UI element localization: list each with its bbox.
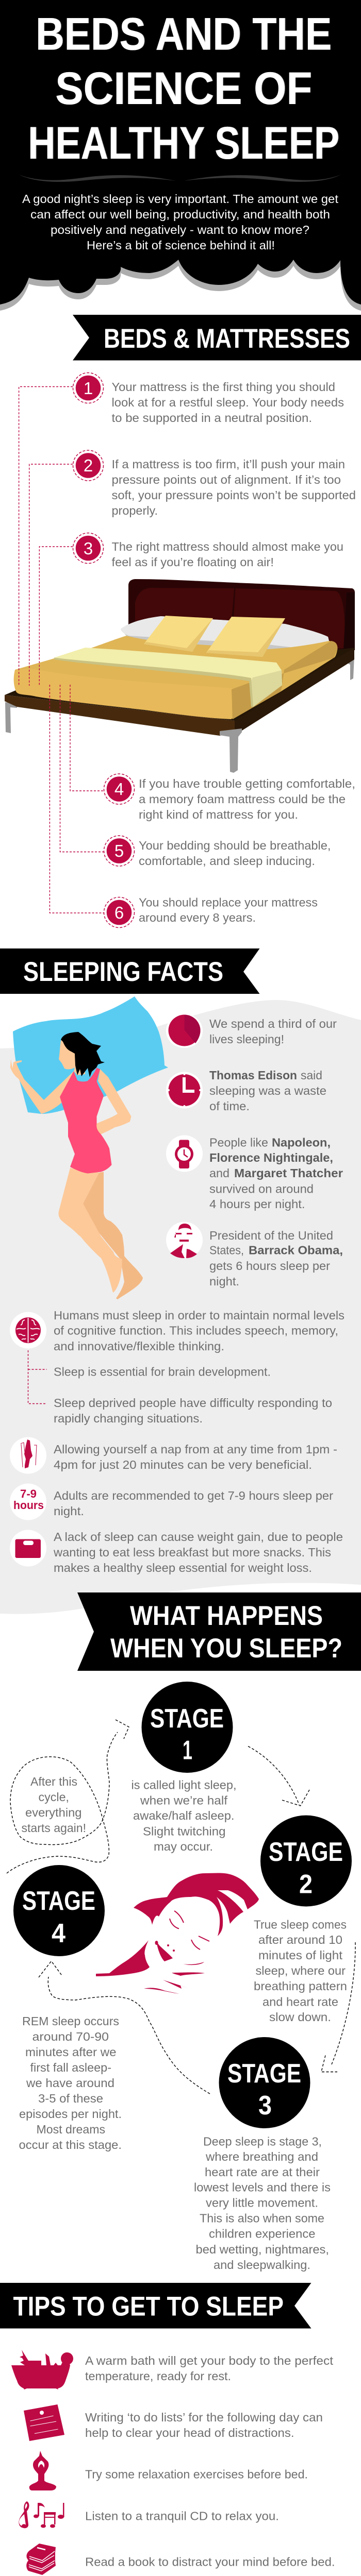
brain dashed connector — [28, 1350, 47, 1403]
title: SCIENCE OF — [55, 62, 312, 114]
fact 2: Thomas Edison: sleeping was a waste — [209, 1084, 326, 1097]
fact 4: Barack Obama — [166, 1222, 343, 1288]
yellow pillows — [144, 616, 285, 657]
step 5: 5 — [114, 841, 124, 860]
fact: sleep deprived: rapidly changing situations. — [54, 1412, 203, 1425]
stage 4 text: first fall asleep- — [30, 2061, 111, 2074]
fact: brain and cognition: of cognitive function. This includes speech, memory, — [54, 1324, 338, 1337]
step 4: 4 — [114, 779, 124, 799]
fact: brain and cognition — [10, 1309, 344, 1353]
stage 3: STAGE — [227, 2059, 301, 2089]
step 5 — [104, 836, 331, 868]
back leg — [83, 1172, 143, 1299]
stage 3 text: heart rate are at their — [205, 2165, 320, 2179]
step 6: around every 8 years. — [139, 911, 256, 924]
intro text: A good night’s sleep is very important. The amount we get — [22, 192, 339, 206]
step 3 — [73, 533, 343, 569]
fact 2: Thomas Edison: of time. — [209, 1099, 250, 1113]
stage 2 text: after around 10 — [258, 1933, 342, 1946]
step 2: properly. — [111, 504, 158, 517]
step 2: If a mattress is too firm, it’ll push your main — [111, 457, 345, 471]
cycle note text — [22, 1775, 86, 1835]
stage 2 text: breathing pattern — [254, 1979, 347, 1993]
step 1: Your mattress is the first thing you should — [111, 380, 335, 394]
swoosh divider — [19, 175, 341, 182]
step 5: Your bedding should be breathable, — [139, 839, 331, 852]
fact 2: Thomas Edison — [166, 1069, 326, 1113]
illustration: sleeping face — [96, 1873, 259, 1994]
step 4: If you have trouble getting comfortable, — [139, 777, 355, 790]
stage 4: STAGE — [22, 1886, 95, 1916]
stage 2 text: True sleep comes — [254, 1918, 347, 1931]
stage 3 text: lowest levels and there is — [194, 2180, 331, 2194]
bed frame — [5, 648, 354, 736]
stage 1 text: when we’re half — [140, 1794, 228, 1807]
step 3: feel as if you’re floating on air! — [111, 555, 274, 569]
stage 4 text: occur at this stage. — [19, 2138, 122, 2151]
stage 1: 1 — [183, 1735, 192, 1765]
step 5: comfortable, and sleep inducing. — [139, 854, 315, 868]
fact: weight gain: wanting to eat less breakfast but more snacks. This — [53, 1546, 331, 1559]
intro text — [22, 192, 339, 252]
fact: 7-9 hours — [10, 1484, 333, 1520]
tip 3: yoga — [29, 2451, 308, 2490]
banner: sleeping facts — [0, 948, 260, 994]
tip 2: to do list — [24, 2404, 323, 2441]
fact 4: Barack Obama: night. — [209, 1275, 239, 1288]
fact 3: Napoleon, Nightingale, Thatcher: and — [209, 1166, 229, 1180]
step 4 — [104, 774, 355, 821]
stage 4 — [13, 1865, 105, 1956]
blue pillow — [13, 996, 168, 1114]
fact 3: Napoleon, Nightingale, Thatcher: People like — [209, 1136, 268, 1149]
tip 2: to do list: Writing ‘to do lists’ for the following day can — [85, 2411, 323, 2424]
arrow: stage 4 back to stage 1 with loop — [7, 1720, 129, 1873]
fact 1: third of lives: We spend a third of our — [209, 1017, 337, 1030]
stage 4 text: episodes per night. — [19, 2107, 122, 2121]
tip 1: bath: A warm bath will get your body to the perfect — [85, 2354, 334, 2367]
intro text: Here’s a bit of science behind it all! — [87, 239, 275, 252]
stage 1 text: is called light sleep, — [131, 1778, 236, 1792]
step 2: 2 — [84, 456, 93, 475]
stage 1: STAGE — [150, 1704, 224, 1734]
stage 2 text: and heart rate — [262, 1995, 338, 2008]
step 6 — [104, 895, 318, 927]
stage 2 text: minutes of light — [258, 1948, 343, 1962]
front leg — [58, 1168, 122, 1293]
fact: 7-9 hours: night. — [54, 1504, 84, 1518]
stage 2 text: slow down. — [269, 2010, 331, 2024]
step 3: The right mattress should almost make you — [111, 540, 343, 553]
fact: brain and cognition: Humans must sleep in order to maintain normal levels — [54, 1309, 344, 1322]
stage 3 — [219, 2037, 310, 2128]
stage 3 text: children experience — [209, 2227, 316, 2240]
back right leg — [344, 656, 354, 680]
tip 1: bath — [11, 2350, 334, 2389]
fact: brain development: Sleep is essential for brain development. — [54, 1365, 271, 1379]
fact 4: Barack Obama: States, — [209, 1244, 244, 1257]
cycle note text: starts again! — [22, 1821, 86, 1835]
fact: weight gain — [10, 1530, 343, 1574]
fact 3: Napoleon, Nightingale, Thatcher: Napoleon, — [272, 1136, 331, 1149]
fact 1: third of lives: lives sleeping! — [209, 1032, 284, 1046]
step 1: to be supported in a neutral position. — [111, 411, 312, 425]
tip 2: to do list: help to clear your head of distractions. — [85, 2426, 294, 2439]
arrow: stage 2 to stage 3 — [321, 1942, 355, 2072]
fact 3: Napoleon, Nightingale, Thatcher — [166, 1136, 343, 1211]
illustration: woman sleeping on pillow — [10, 996, 168, 1299]
fact 3: Napoleon, Nightingale, Thatcher: Florence Nightingale, — [209, 1151, 333, 1164]
tip 4: music — [19, 2501, 279, 2528]
arrow: stage 1 to stage 2 — [248, 1747, 309, 1806]
banner: beds and mattresses — [73, 315, 361, 361]
stage 3 text: and sleepwalking. — [214, 2258, 310, 2272]
stage 4 text: minutes after we — [25, 2045, 117, 2059]
banner: tips to get to sleep: TIPS TO GET TO SLEEP — [13, 2292, 284, 2321]
fact: nap: Allowing yourself a nap from at any time from 1pm - — [54, 1443, 337, 1456]
stage 4 text: we have around — [26, 2076, 114, 2090]
stage 1 text — [131, 1778, 236, 1853]
step 2 — [73, 450, 356, 517]
step 2: pressure points out of alignment. If it’s too — [111, 473, 341, 486]
fact 3: Napoleon, Nightingale, Thatcher: Margaret Thatcher — [234, 1166, 343, 1180]
stage 4 text: 3-5 of these — [38, 2092, 103, 2105]
blanket — [54, 648, 282, 707]
mattress and bedding — [14, 636, 337, 719]
intro text: can affect our well being, productivity, and health both — [30, 208, 330, 221]
step 4: a memory foam mattress could be the — [139, 792, 346, 806]
stage 1 text: awake/half asleep. — [133, 1809, 234, 1822]
fact: sleep deprived: Sleep deprived people have difficulty responding to — [54, 1396, 332, 1410]
fact 4: Barack Obama: Barrack Obama, — [249, 1244, 343, 1257]
fact: sleep deprived — [54, 1396, 332, 1425]
intro text: positively and negatively - want to know more? — [51, 223, 309, 236]
step 4: right kind of mattress for you. — [139, 808, 298, 821]
header panel: black curtain with clouds — [0, 0, 361, 311]
stage 3: 3 — [258, 2091, 272, 2121]
step dashed connectors — [19, 386, 104, 913]
title — [28, 8, 339, 168]
stage 1 text: may occur. — [154, 1840, 213, 1853]
fact 4: Barack Obama: gets 6 hours sleep per — [209, 1259, 330, 1273]
banner: what happens when you sleep: WHAT HAPPENS — [130, 1601, 323, 1631]
fact 2: Thomas Edison: Thomas Edison — [209, 1069, 297, 1082]
fact 3: Napoleon, Nightingale, Thatcher: 4 hours per night. — [209, 1197, 305, 1211]
fact: nap — [10, 1437, 337, 1473]
banner: tips to get to sleep — [0, 2283, 311, 2329]
fact: nap: 4pm for just 20 minutes can be very beneficial. — [54, 1458, 312, 1471]
tip 3: yoga: Try some relaxation exercises before bed. — [85, 2468, 308, 2481]
face and neck — [59, 1036, 85, 1075]
tip 4: music: Listen to a tranquil CD to relax you. — [85, 2509, 279, 2522]
stage 4: 4 — [52, 1919, 65, 1948]
tip 5: books — [26, 2544, 335, 2575]
stage 2 text: sleep, where our — [256, 1964, 346, 1977]
stage 3 text: where breathing and — [205, 2150, 318, 2163]
stage 4 text: around 70-90 — [32, 2030, 109, 2043]
stage 2 — [260, 1816, 352, 1906]
stage 4 text: REM sleep occurs — [22, 2014, 119, 2028]
fact 1: third of lives — [166, 1014, 337, 1048]
step 1 — [73, 373, 344, 425]
stage 3 text: bed wetting, nightmares, — [196, 2243, 329, 2256]
arrow: stage 3 to stage 4 — [39, 1961, 210, 2094]
fact: brain and cognition: and innovative/flexible thinking. — [54, 1340, 224, 1353]
stage 3 text: very little movement. — [206, 2196, 318, 2209]
stage 2: 2 — [299, 1869, 313, 1899]
fact: 7-9 hours: hours — [13, 1499, 44, 1512]
stage 2: STAGE — [269, 1837, 343, 1867]
cycle note text: After this — [30, 1775, 77, 1788]
step 3: 3 — [84, 539, 93, 558]
cycle note text: cycle, — [38, 1790, 69, 1804]
stage 1 text: Slight twitching — [143, 1825, 226, 1838]
left leg — [5, 702, 17, 733]
fact 4: Barack Obama: President of the United — [209, 1229, 333, 1242]
white pillow — [121, 616, 329, 653]
fact 2: Thomas Edison: said — [301, 1069, 322, 1082]
illustration: bed — [5, 579, 355, 773]
banner: what happens when you sleep — [77, 1592, 361, 1671]
stage 2 text — [254, 1918, 347, 2024]
step 1: 1 — [84, 379, 93, 398]
step 6: 6 — [114, 903, 124, 922]
stage 4 text: Most dreams — [36, 2123, 105, 2136]
stage 4 text — [19, 2014, 122, 2151]
arms — [10, 1059, 74, 1114]
hair — [61, 1032, 105, 1077]
dress — [60, 1067, 111, 1174]
stage 3 text: Deep sleep is stage 3, — [203, 2135, 322, 2148]
front leg — [220, 728, 242, 773]
stage 3 text: This is also when some — [200, 2211, 324, 2225]
stage 3 text — [194, 2135, 331, 2272]
step 6: You should replace your mattress — [139, 895, 318, 909]
step 1: look at for a restful sleep. Your body needs — [111, 396, 344, 409]
fact: weight gain: A lack of sleep can cause weight gain, due to people — [54, 1530, 343, 1544]
grey facts background — [0, 1000, 361, 1614]
fact: 7-9 hours: 7-9 — [20, 1487, 37, 1500]
cycle note text: everything — [25, 1806, 81, 1819]
fact: weight gain: makes a healthy sleep essential for weight loss. — [54, 1561, 312, 1574]
step 2: soft, your pressure points won’t be supported — [111, 488, 356, 502]
tip 5: books: Read a book to distract your mind before bed. — [85, 2555, 335, 2569]
fact 3: Napoleon, Nightingale, Thatcher: survived on around — [209, 1182, 314, 1195]
stage 1 — [141, 1682, 233, 1773]
banner: sleeping facts: SLEEPING FACTS — [23, 957, 223, 987]
tip 1: bath: temperature, ready for rest. — [85, 2369, 231, 2383]
fact: 7-9 hours: Adults are recommended to get 7-9 hours sleep per — [54, 1489, 333, 1502]
